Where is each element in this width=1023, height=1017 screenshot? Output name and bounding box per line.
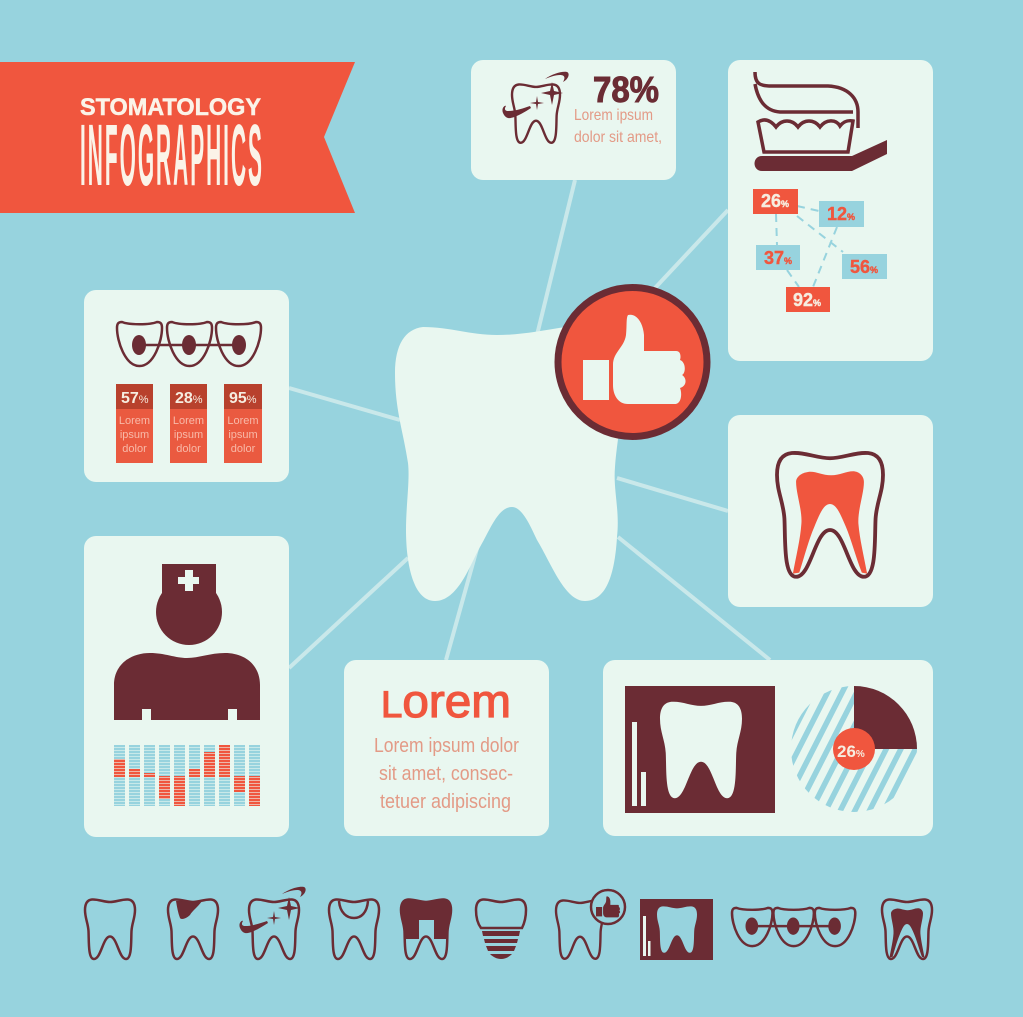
badge circle bbox=[558, 288, 707, 436]
bristles bbox=[758, 120, 853, 152]
stat bar: 28% bbox=[170, 384, 207, 463]
stat: 12%: 12% bbox=[827, 204, 855, 224]
dark slice bbox=[854, 686, 917, 749]
icon: tooth with pulp bbox=[882, 899, 932, 959]
stat bar: 28%: ipsum bbox=[174, 429, 203, 441]
body bbox=[114, 653, 260, 720]
equalizer chart bbox=[114, 745, 260, 806]
title ribbon bbox=[0, 62, 355, 213]
icon: x-ray bbox=[640, 899, 713, 960]
icon: tooth with filling bbox=[329, 899, 379, 959]
stat: 56%: 56% bbox=[850, 257, 878, 277]
text block bbox=[374, 735, 519, 813]
stat bar: 57%: 57% bbox=[121, 390, 149, 407]
icon: tooth with crown bbox=[401, 899, 451, 959]
panel: braces bbox=[84, 290, 289, 482]
icon: tooth with thumbs-up bbox=[556, 890, 625, 959]
stat: 37%: 37% bbox=[764, 248, 792, 268]
central tooth bbox=[395, 327, 622, 601]
stat: 26%: 26% bbox=[761, 191, 789, 211]
panel: lorem text bbox=[344, 660, 549, 836]
cross bbox=[178, 570, 199, 591]
title line 2: INFOGRAPHICS bbox=[80, 108, 264, 204]
stat bar: 95%: 95% bbox=[229, 390, 257, 407]
stat: 37% bbox=[756, 245, 800, 270]
icon: implant bbox=[476, 899, 526, 959]
thumbs-up badge bbox=[558, 288, 707, 436]
panel: x-ray and pie bbox=[603, 660, 933, 836]
icon: plain tooth bbox=[85, 899, 135, 959]
panel: tooth root bbox=[728, 415, 933, 607]
stat bar: 95%: ipsum bbox=[228, 429, 258, 441]
handle bbox=[754, 140, 887, 171]
stat: 26% bbox=[753, 189, 798, 214]
panel background bbox=[471, 60, 676, 180]
icon: braces bbox=[732, 908, 855, 946]
stat bar: 57%: ipsum bbox=[120, 429, 149, 441]
text block: Lorem ipsum bbox=[574, 107, 653, 124]
panel: toothbrush bbox=[728, 60, 933, 361]
icon: thumb hand bbox=[613, 315, 686, 404]
panel background bbox=[728, 60, 933, 361]
connector lines bbox=[289, 180, 770, 668]
pie chart bbox=[790, 685, 918, 813]
text block bbox=[574, 107, 662, 146]
stat bar: 95%: dolor bbox=[231, 443, 256, 455]
icon: thumb cuff bbox=[583, 360, 609, 400]
text block: sit amet, consec- bbox=[379, 763, 513, 785]
toothpaste bbox=[755, 72, 858, 128]
stat bar: 57% bbox=[116, 384, 153, 463]
stat: 78%: 78% bbox=[593, 69, 659, 110]
panel background bbox=[84, 290, 289, 482]
icon: nurse bbox=[114, 564, 260, 720]
icon: toothbrush bbox=[754, 72, 887, 171]
panel background bbox=[344, 660, 549, 836]
text block: Lorem ipsum dolor bbox=[374, 735, 519, 757]
dashed links bbox=[776, 206, 843, 287]
icon: braces bbox=[117, 322, 261, 366]
panel: 78% sparkle tooth bbox=[471, 60, 676, 180]
title line 1: STOMATOLOGY bbox=[80, 94, 261, 121]
stat bar: 57%: Lorem bbox=[119, 415, 150, 427]
icon: tooth with pulp bbox=[777, 453, 883, 577]
text block: dolor sit amet, bbox=[574, 129, 662, 146]
panel background bbox=[603, 660, 933, 836]
cap bbox=[162, 564, 216, 596]
head bbox=[156, 579, 222, 645]
stat: 56% bbox=[842, 254, 887, 279]
stat: 92% bbox=[786, 287, 830, 312]
stat bar: 28%: 28% bbox=[175, 390, 203, 407]
icon: sparkling tooth bbox=[502, 72, 569, 143]
value: 26% bbox=[837, 742, 865, 761]
panel background bbox=[728, 415, 933, 607]
stat bar: 28%: Lorem bbox=[173, 415, 204, 427]
icon: sparkling tooth bbox=[239, 887, 306, 959]
value badge bbox=[833, 728, 875, 770]
panel: nurse bbox=[84, 536, 289, 837]
stat: 12% bbox=[819, 201, 864, 227]
stat bar: 95%: Lorem bbox=[227, 415, 259, 427]
heading: Lorem bbox=[381, 675, 511, 727]
ribbon shape bbox=[0, 62, 355, 213]
panel background bbox=[84, 536, 289, 837]
x-ray bbox=[625, 686, 775, 813]
text block: tetuer adipiscing bbox=[380, 791, 511, 813]
stat: 92%: 92% bbox=[793, 290, 821, 310]
icon: tooth with decay bbox=[168, 899, 218, 959]
hatched slice bbox=[790, 685, 918, 813]
stat bar: 28%: dolor bbox=[176, 443, 201, 455]
stat bar: 57%: dolor bbox=[122, 443, 147, 455]
stat bar: 95% bbox=[224, 384, 262, 463]
icon row bbox=[85, 887, 932, 960]
